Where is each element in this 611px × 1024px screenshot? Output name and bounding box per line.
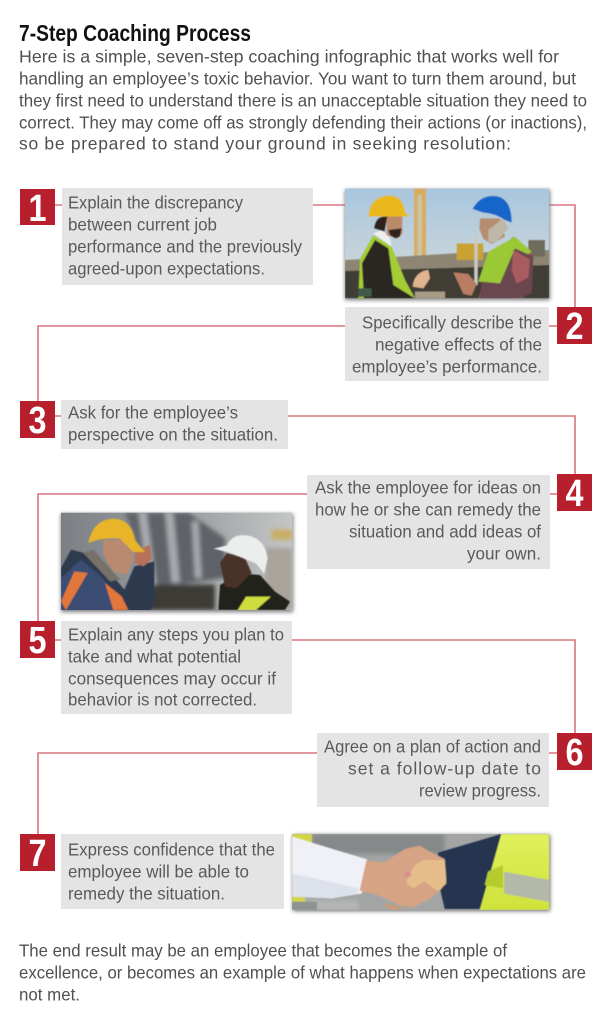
step 3: 3 (28, 400, 46, 442)
step 7: employee will be able to (68, 862, 249, 882)
step 1: 1 (28, 188, 46, 230)
step 6: Agree on a plan of action and (324, 737, 541, 757)
step 5: behavior is not corrected. (68, 690, 257, 710)
step 3 (20, 400, 288, 449)
step 1: Explain the discrepancy (68, 193, 243, 213)
closing paragraph (19, 941, 586, 1005)
intro paragraph (19, 47, 587, 154)
step 5 (20, 620, 292, 714)
step 2: employee’s performance. (352, 357, 542, 377)
step 2: Specifically describe the (362, 313, 542, 333)
step 4: situation and add ideas of (349, 522, 541, 542)
intro paragraph: Here is a simple, seven-step coaching infographic that works well for (19, 47, 559, 67)
step 6: 6 (566, 732, 584, 774)
closing paragraph: The end result may be an employee that becomes the example of (19, 941, 507, 961)
step 5: take and what potential (68, 647, 241, 667)
intro paragraph: correct. They may come off as strongly defending their actions (or inactions), (19, 113, 587, 133)
step 4: 4 (566, 473, 584, 515)
step 3: perspective on the situation. (68, 425, 278, 445)
step 6 (317, 732, 592, 807)
intro paragraph: so be prepared to stand your ground in seeking resolution: (19, 134, 511, 154)
step 2: negative effects of the (375, 335, 542, 355)
step 1: agreed-upon expectations. (68, 259, 265, 279)
step 3: Ask for the employee’s (68, 403, 238, 423)
step 2: 2 (566, 306, 584, 348)
closing paragraph: excellence, or becomes an example of what happens when expectations are (19, 963, 586, 983)
step 6: set a follow-up date to (348, 759, 541, 779)
step 7: Express confidence that the (68, 840, 275, 860)
step 7: 7 (28, 833, 46, 875)
step 5: Explain any steps you plan to (68, 625, 284, 645)
intro paragraph: they first need to understand there is an unacceptable situation they need to (19, 91, 587, 111)
step 7 (20, 833, 284, 909)
step 2 (345, 306, 592, 381)
step 1: between current job (68, 215, 217, 235)
photo: handshake (292, 834, 550, 911)
closing paragraph: not met. (19, 985, 80, 1005)
photo: two workers talking by a pipeline (61, 513, 293, 627)
intro paragraph: handling an employee’s toxic behavior. You want to turn them around, but (19, 69, 576, 89)
step 4: Ask the employee for ideas on (315, 478, 541, 498)
photo: two workers in yellow and blue hard hats (345, 188, 550, 300)
step 4: your own. (467, 544, 541, 564)
step 1: performance and the previously (68, 237, 302, 257)
step 4: how he or she can remedy the (315, 500, 541, 520)
step 6: review progress. (419, 781, 541, 801)
step 1 (20, 188, 313, 285)
title: 7-Step Coaching Process (19, 20, 251, 46)
step 7: remedy the situation. (68, 884, 225, 904)
step 5: 5 (28, 620, 46, 662)
step 4 (307, 473, 592, 569)
connector lines between steps (38, 205, 575, 834)
step 5: consequences may occur if (68, 669, 276, 689)
